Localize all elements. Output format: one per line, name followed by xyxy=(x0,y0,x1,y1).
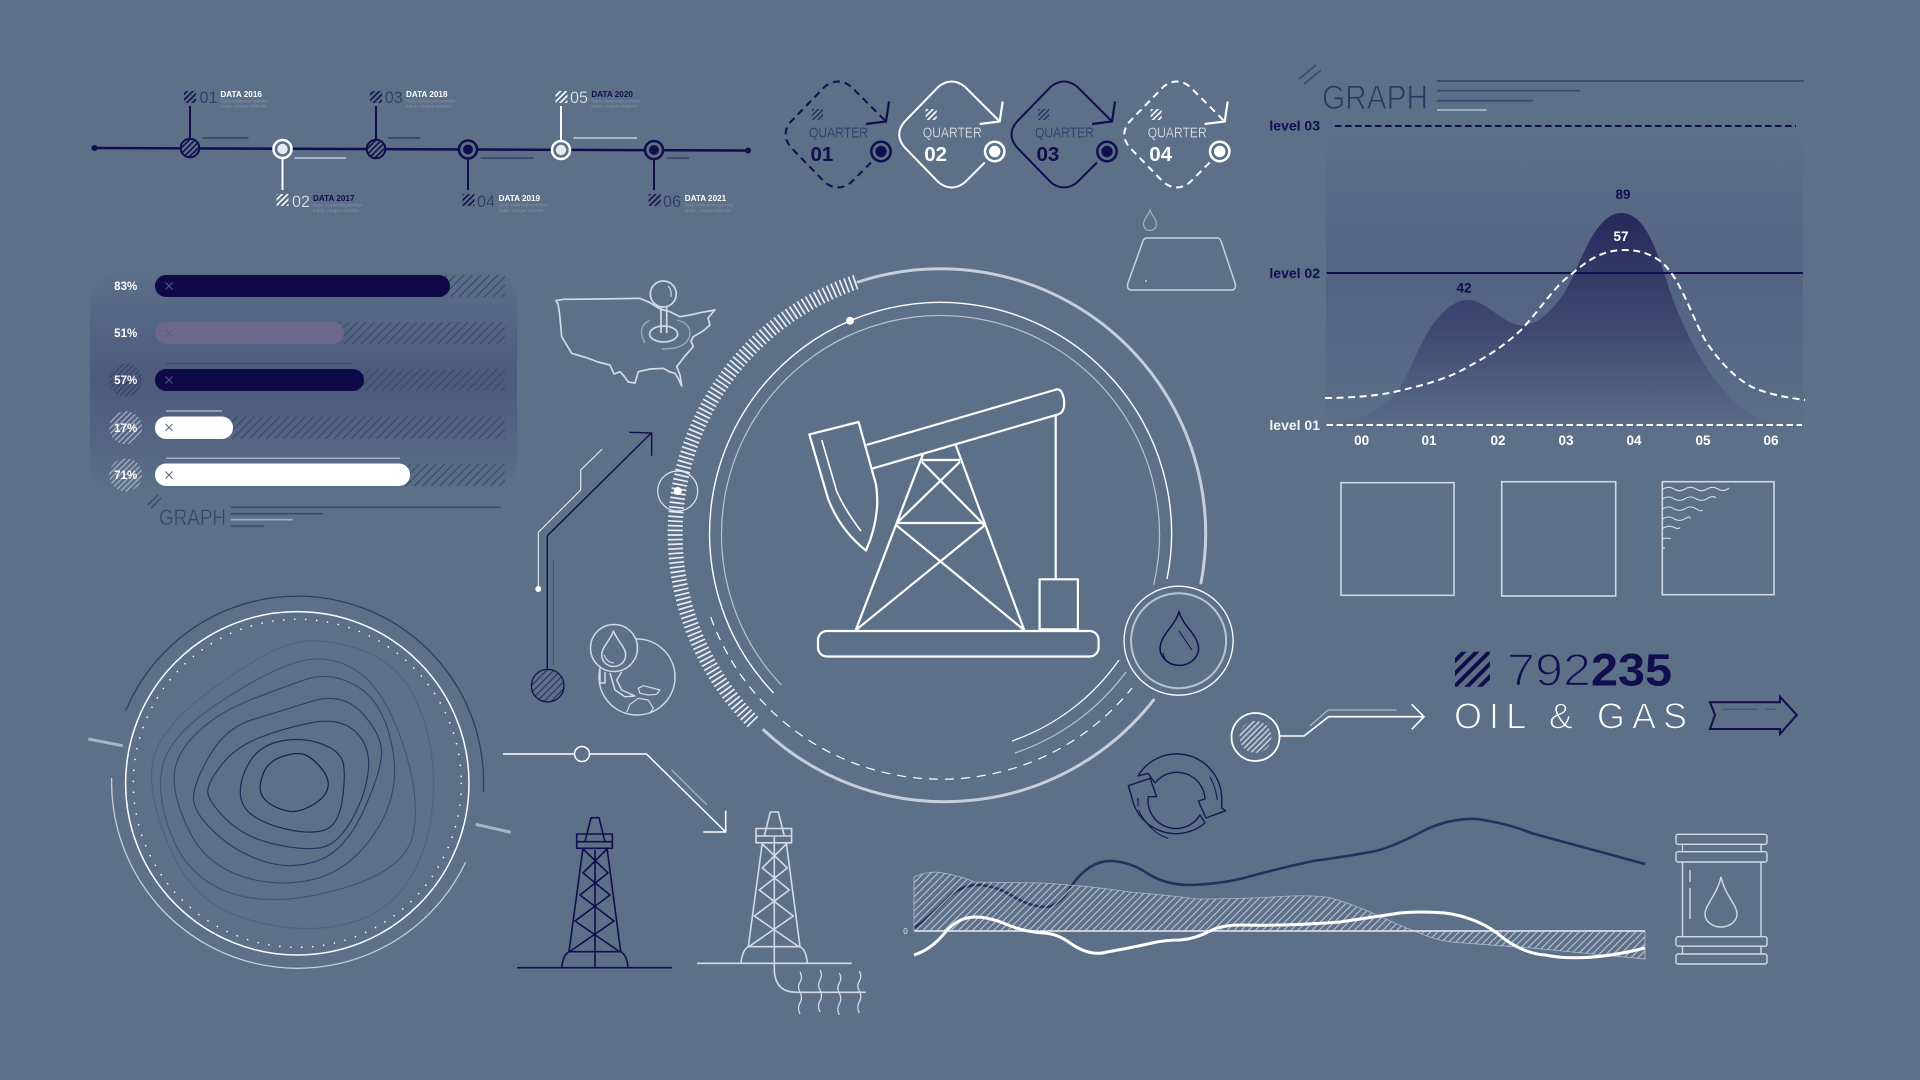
outer circle xyxy=(126,612,469,955)
axis labels: 02 xyxy=(1490,433,1506,448)
timeline item 01: 01 xyxy=(200,88,218,107)
zero label: 0 xyxy=(903,927,908,936)
bar 51%: 51% xyxy=(114,328,137,340)
outer arcs xyxy=(126,596,484,792)
quarter 04: QUARTER xyxy=(1148,126,1207,142)
level lines xyxy=(1326,126,1803,425)
large graph heading: GRAPH xyxy=(1322,79,1428,117)
level labels xyxy=(1269,118,1320,433)
center gauge rings xyxy=(658,269,1206,802)
bar 51% xyxy=(114,322,505,344)
quarter 01: 01 xyxy=(810,143,833,166)
white ring xyxy=(710,302,1172,693)
quarter 02: QUARTER xyxy=(923,126,982,142)
timeline item 02: 02 xyxy=(292,192,310,211)
dark series xyxy=(914,819,1645,928)
line chart with hatched area xyxy=(903,819,1645,959)
contour lines xyxy=(152,641,434,929)
value labels: 57 xyxy=(1613,229,1629,244)
bar 71% xyxy=(109,458,505,492)
timeline item 06: 06 xyxy=(663,192,681,211)
icon: dark derrick xyxy=(517,818,672,968)
quarter 03: 03 xyxy=(1036,143,1059,166)
arrow: node to derrick xyxy=(503,746,726,832)
stat: 792235 oil and gas xyxy=(1454,645,1687,736)
axis labels: 00 xyxy=(1354,433,1369,448)
small graph heading xyxy=(148,495,501,530)
timeline item 03 xyxy=(367,88,455,158)
bar 71%: 71% xyxy=(114,470,137,482)
axis labels: 03 xyxy=(1558,433,1574,448)
axis labels: 04 xyxy=(1626,433,1642,448)
stat: 792235 oil and gas: 792 xyxy=(1507,645,1591,696)
timeline item 06: Nunc commodo porttitor xyxy=(685,202,734,208)
dotted circle xyxy=(133,619,461,947)
icon: USA map with pin xyxy=(556,281,715,386)
timeline item 05: turpis, congue molestie xyxy=(591,104,638,110)
hatched ring xyxy=(675,282,856,722)
bar 83%: 83% xyxy=(114,281,137,293)
bar 17% xyxy=(109,411,505,444)
timeline item 05: Nunc commodo porttitor xyxy=(591,98,641,104)
timeline item 01: DATA 2016 xyxy=(220,89,262,99)
timeline item 04 xyxy=(459,140,548,214)
large graph heading xyxy=(1299,65,1804,117)
timeline item 04: DATA 2019 xyxy=(499,193,540,203)
axis labels: 05 xyxy=(1695,433,1711,448)
timeline item 05: DATA 2020 xyxy=(591,89,633,99)
timeline item 03: Nunc commodo porttitor xyxy=(406,98,455,104)
icon: drop in circle xyxy=(1124,586,1233,695)
icon: pump jack xyxy=(809,389,1099,656)
hatched area series xyxy=(914,872,1645,959)
small graph heading: GRAPH xyxy=(159,505,226,530)
quarter 03: QUARTER xyxy=(1035,126,1094,142)
timeline item 05: 05 xyxy=(570,88,588,107)
level labels: level 03 xyxy=(1269,118,1320,134)
lower right arcs xyxy=(1012,660,1119,741)
area chart xyxy=(1269,118,1805,448)
axis labels: 06 xyxy=(1763,433,1779,448)
quarter 02 xyxy=(899,82,1004,188)
quarter 04: 04 xyxy=(1149,143,1173,166)
quarter 03 xyxy=(1012,82,1117,188)
grey ring xyxy=(722,316,1160,685)
value labels xyxy=(1456,187,1631,296)
timeline item 01 xyxy=(181,88,270,157)
three square frames xyxy=(1341,482,1774,596)
timeline item 03: 03 xyxy=(385,88,403,107)
level labels: level 02 xyxy=(1269,265,1320,281)
icon: drop over tank xyxy=(1128,210,1236,290)
icon: globe with drop xyxy=(590,624,675,715)
timeline item 06: DATA 2021 xyxy=(685,193,726,203)
level labels: level 01 xyxy=(1269,417,1320,433)
ticks xyxy=(88,739,511,832)
value labels: 42 xyxy=(1456,281,1472,296)
bar 83% xyxy=(114,275,505,297)
quarter badges xyxy=(786,82,1229,188)
area series xyxy=(1326,213,1800,425)
outer arcs xyxy=(764,269,1206,802)
stat: 792235 oil and gas: 235 xyxy=(1591,645,1672,696)
timeline item 03: DATA 2018 xyxy=(406,89,448,99)
panel: percentage bars xyxy=(90,270,517,493)
axis labels: 01 xyxy=(1421,433,1437,448)
axis labels xyxy=(1354,433,1779,448)
value labels: 89 xyxy=(1615,187,1631,202)
timeline item 02 xyxy=(274,140,362,214)
arrow: hatched node to oil and gas xyxy=(1232,704,1424,761)
timeline item 02: Nunc commodo porttitor xyxy=(313,202,362,208)
quarter 01 xyxy=(786,82,891,188)
timeline xyxy=(92,88,751,214)
timeline axis xyxy=(92,145,751,154)
arrows: circuit up to map xyxy=(531,432,652,702)
zero line xyxy=(914,930,1645,932)
dashed series xyxy=(1325,250,1805,400)
timeline item 06: turpis, congue molestie xyxy=(685,208,731,214)
timeline item 02: turpis, congue molestie xyxy=(313,208,359,214)
stat: 792235 oil and gas: OIL & GAS xyxy=(1454,695,1687,736)
quarter 04 xyxy=(1124,82,1229,188)
bar 57% xyxy=(109,364,505,396)
icon: banner arrow xyxy=(1710,697,1797,734)
timeline item 04: Nunc commodo porttitor xyxy=(499,202,548,208)
timeline item 06 xyxy=(645,141,734,214)
timeline item 01: turpis, congue molestie xyxy=(220,104,267,110)
icon: oil barrel xyxy=(1676,834,1767,964)
contour map xyxy=(88,596,511,968)
quarter 01: QUARTER xyxy=(809,126,868,142)
icon: recycle arrows xyxy=(1128,754,1226,838)
ring marker target xyxy=(658,471,698,511)
timeline item 01: Nunc commodo porttitor xyxy=(220,98,270,104)
dashed ring xyxy=(711,617,1132,779)
quarter 02: 02 xyxy=(924,143,947,166)
white series xyxy=(914,912,1645,958)
timeline item 04: turpis, congue molestie xyxy=(499,208,545,214)
ring marker dot xyxy=(846,317,854,325)
timeline item 02: DATA 2017 xyxy=(313,193,355,203)
icon: light derrick with pipeline xyxy=(697,812,866,1015)
timeline item 03: turpis, congue molestie xyxy=(406,104,452,110)
bar 57%: 57% xyxy=(114,375,137,387)
bar 17%: 17% xyxy=(114,423,137,435)
timeline item 04: 04 xyxy=(477,192,495,211)
timeline item 05 xyxy=(552,88,641,159)
